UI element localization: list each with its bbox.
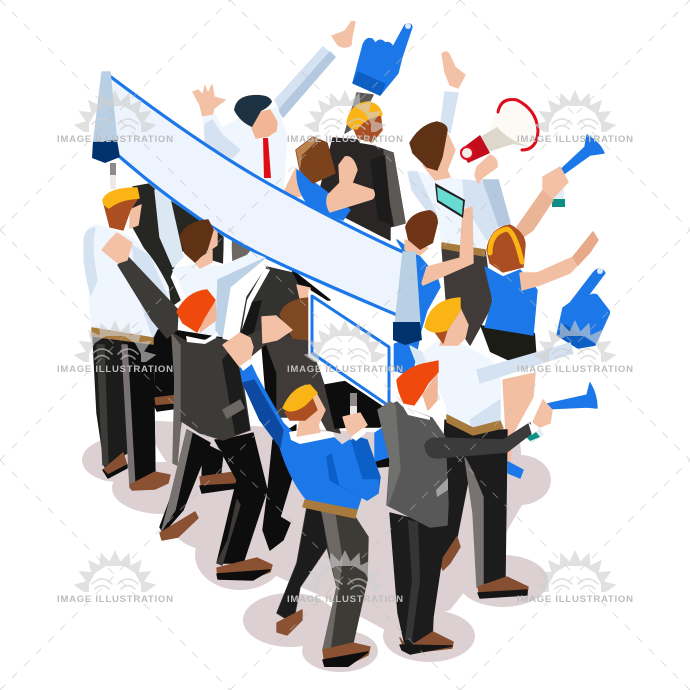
watermark text: IMAGE ILLUSTRATION: [57, 134, 173, 145]
person: back man's legs at centre: [173, 373, 237, 493]
icon: vuvuzela bottom right: [526, 383, 597, 443]
watermark text: IMAGE ILLUSTRATION: [517, 594, 633, 605]
person: man in dark jacket with brown hair: [262, 298, 340, 550]
person: front man in grey jacket with orange hair: [378, 361, 552, 654]
person: woman with yellow headband and blue top: [480, 167, 598, 478]
placard legs: [325, 373, 393, 467]
banner pole right: [393, 252, 422, 345]
person: man with yellow hair and dark suit: [320, 93, 405, 240]
person: far-left man in white shirt with yellow hair: [84, 188, 170, 490]
banner: [111, 77, 403, 315]
person: man with megaphone, white shirt: [408, 52, 510, 345]
watermark text: IMAGE ILLUSTRATION: [57, 594, 173, 605]
watermark text: [57, 134, 633, 605]
banner pole left: [92, 72, 120, 189]
person: man in white shirt with brown hair: [172, 220, 265, 352]
crowd artwork: [84, 21, 610, 667]
person: front man in dark suit with orange hair, hand raised: [102, 233, 292, 580]
watermark text: IMAGE ILLUSTRATION: [287, 364, 403, 375]
person: dark suit behind banner left: [133, 183, 223, 411]
watermark text: IMAGE ILLUSTRATION: [57, 364, 173, 375]
watermark text: IMAGE ILLUSTRATION: [517, 364, 633, 375]
watermark text: IMAGE ILLUSTRATION: [517, 134, 633, 145]
ground shadows: [82, 420, 551, 672]
watermark text: IMAGE ILLUSTRATION: [287, 134, 403, 145]
person: man with tie, arms raised: [193, 21, 355, 190]
person: dark suit with white lapel: [223, 235, 330, 345]
icon: vuvuzela and bottle top right: [552, 135, 604, 207]
person: front man in white shirt with yellow hair: [410, 298, 573, 598]
placard sign: [309, 290, 393, 412]
watermark icons: [74, 90, 616, 592]
icon: blue foam finger hand: [353, 23, 412, 95]
icon: megaphone: [460, 100, 538, 163]
person: front man in blue sweater with yellow hair: [223, 333, 380, 667]
person: girl holding tablet: [392, 183, 473, 375]
icon: blue foam finger right: [557, 268, 610, 348]
watermark text: IMAGE ILLUSTRATION: [287, 594, 403, 605]
person: woman with brown hair and blue top: [285, 137, 374, 220]
